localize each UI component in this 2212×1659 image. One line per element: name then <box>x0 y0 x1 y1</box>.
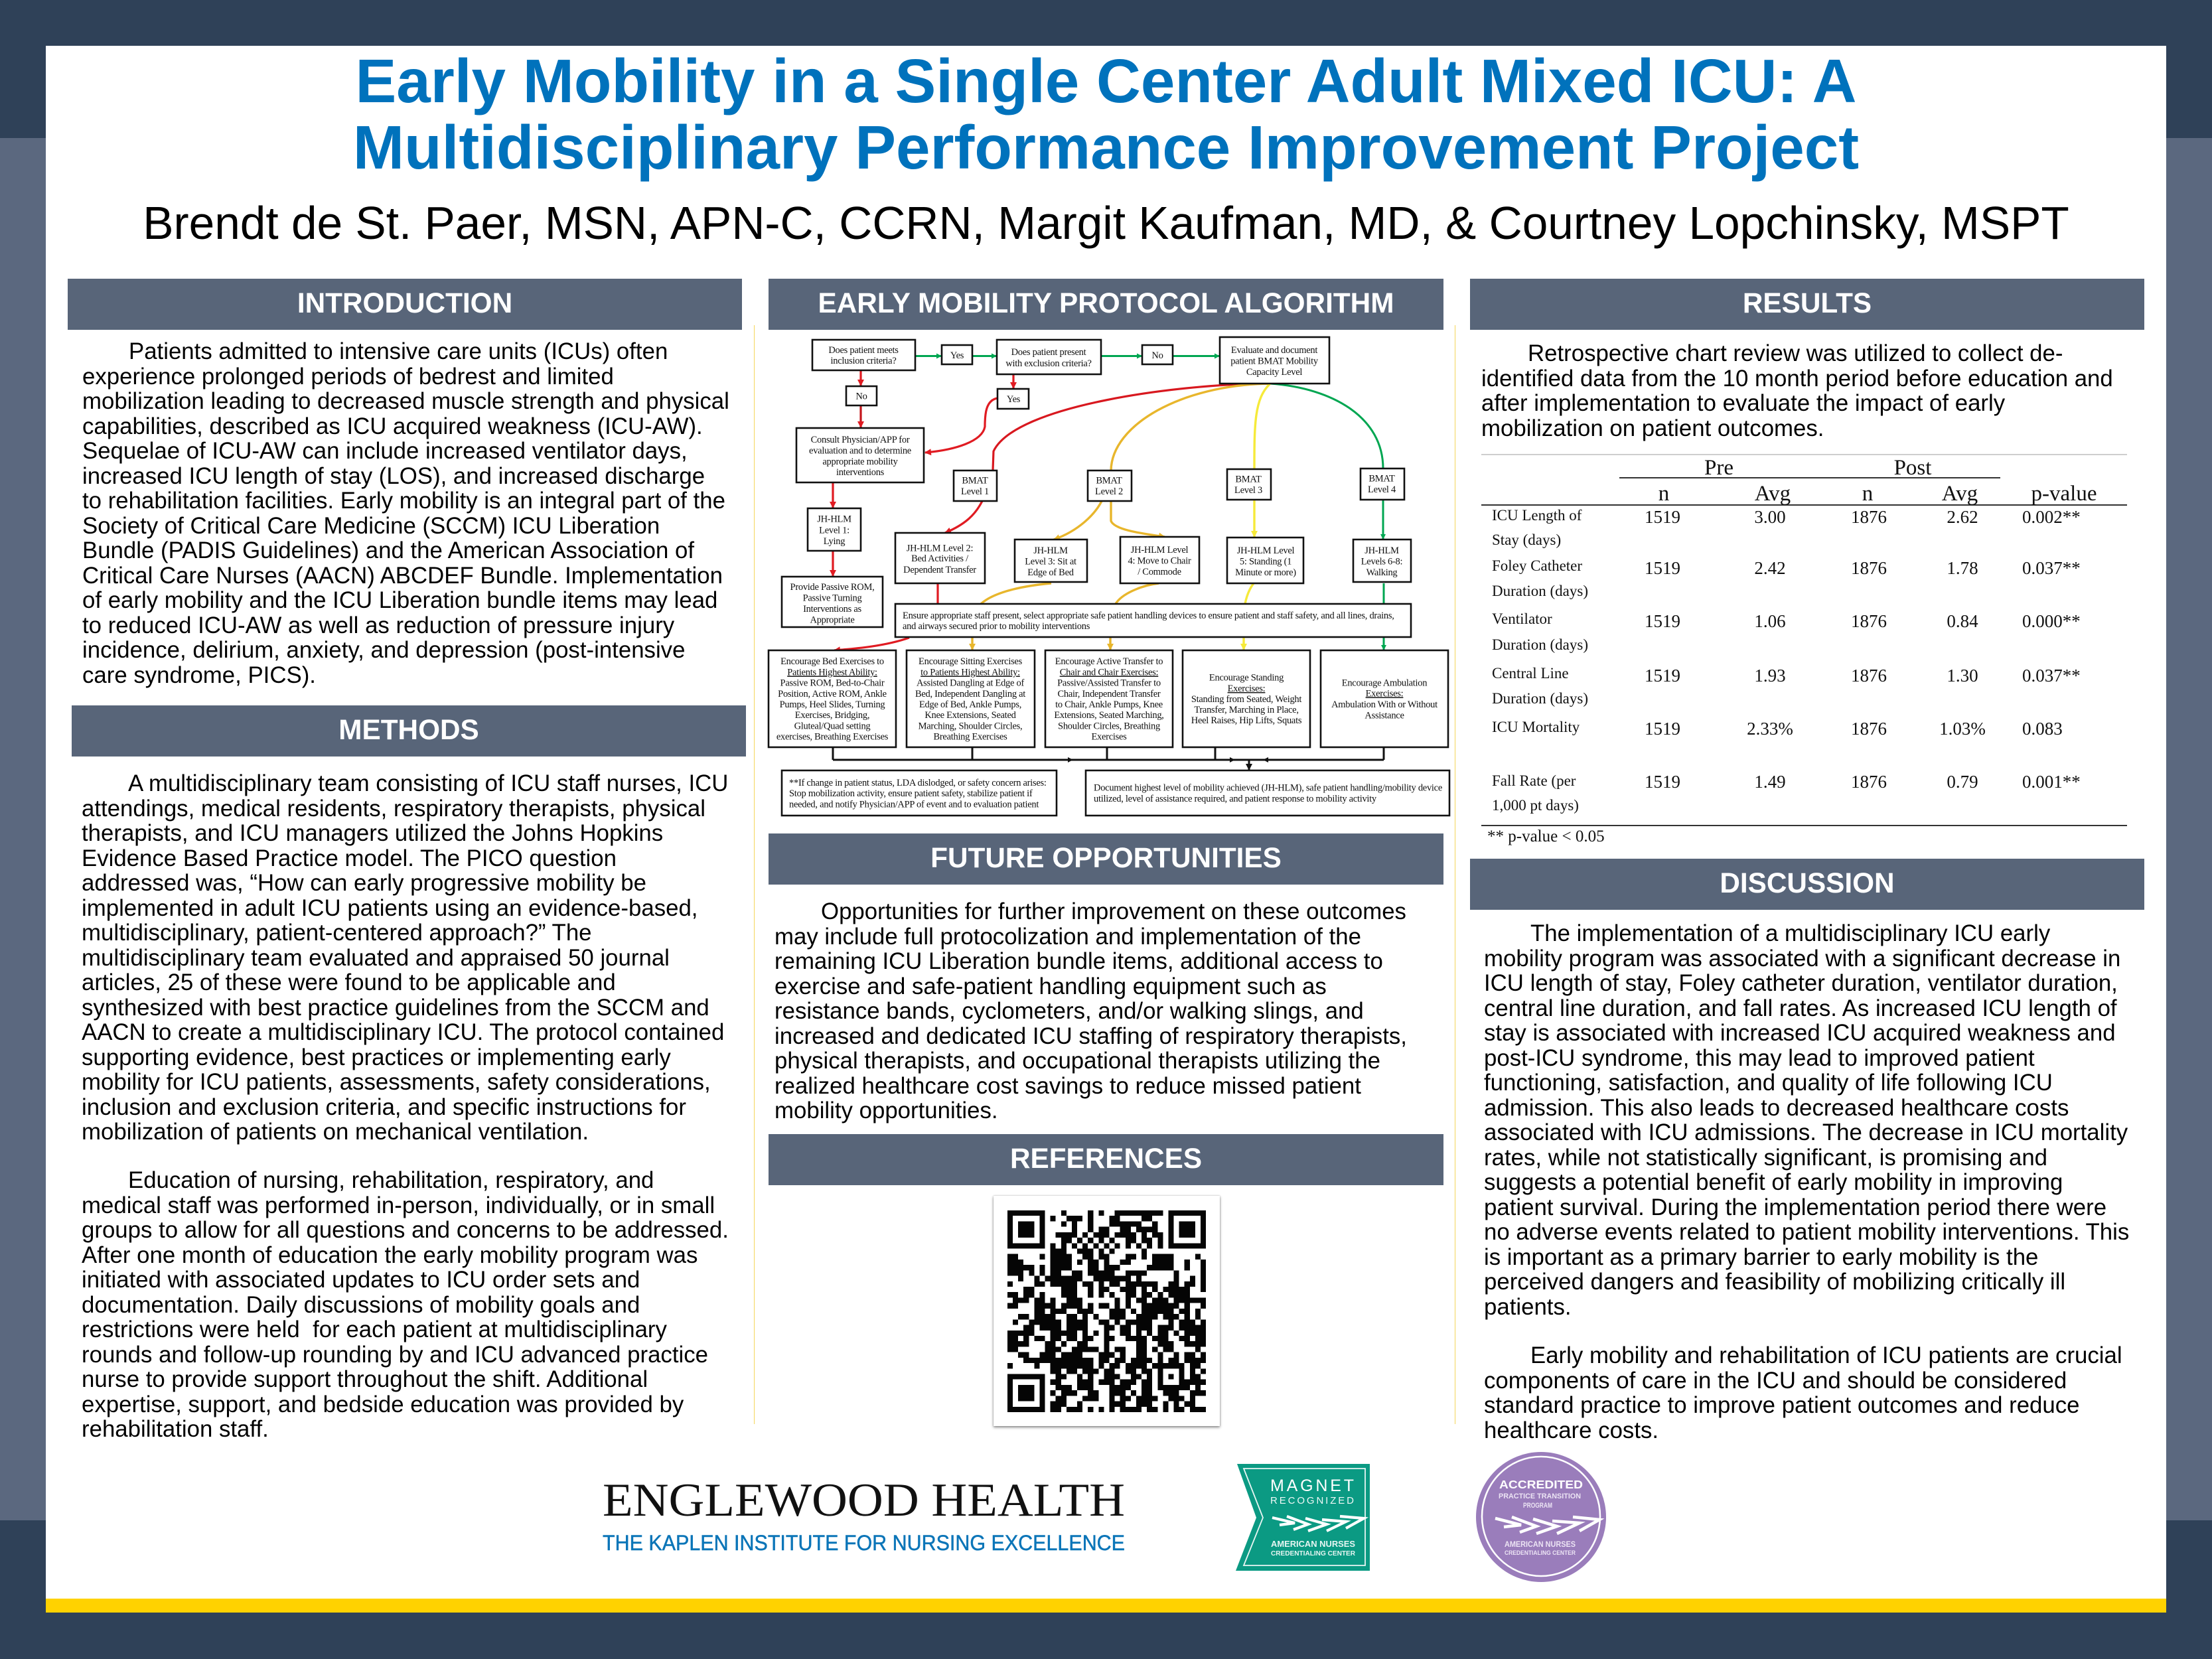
row: ICU mortality <box>1492 719 2063 739</box>
row: fall rate: 1.49 <box>1754 772 1786 792</box>
panel: methods <box>72 705 746 1442</box>
row: fall rate: Fall Rate (per <box>1492 772 1576 789</box>
box: JH-HLM level 2: Bed Activities / <box>911 553 969 564</box>
box: JH-HLM level 4: 4: Move to Chair <box>1128 556 1191 567</box>
heading: discussion: DISCUSSION <box>1720 867 1895 899</box>
heading: methods: METHODS <box>338 714 479 745</box>
QR code card <box>994 1196 1220 1426</box>
box: BMAT level 1: Level 1 <box>961 486 989 497</box>
yellow footer stripe <box>46 1599 2166 1613</box>
heading: discussion <box>1470 859 2144 910</box>
box: sitting exercises: Encourage Sitting Exercises <box>919 656 1023 667</box>
table header: n <box>1862 482 1873 506</box>
box: yes: Yes <box>950 350 964 361</box>
box: JH-HLM level 3: JH-HLM <box>1033 545 1068 556</box>
table footnote: ** p-value < 0.05 <box>1487 828 1605 845</box>
box: exclusion criteria <box>997 340 1101 374</box>
box: bed exercises: exercises, Breathing Exercises <box>776 731 889 742</box>
row: fall rate <box>1492 772 2081 814</box>
authors: Brendt de St. Paer, MSN, APN-C, CCRN, Margit Kaufman, MD, & Courtney Lopchinsky, MSPT <box>143 197 2069 249</box>
box: JH-HLM level 3: Level 3: Sit at <box>1025 556 1076 567</box>
badge: Accredited Practice Transition Program: PRACTICE TRANSITION <box>1499 1492 1581 1500</box>
heading: results: RESULTS <box>1743 287 1872 319</box>
panel: discussion <box>1470 859 2144 1443</box>
row: Foley catheter duration: Duration (days) <box>1492 583 1588 599</box>
row: ventilator duration <box>1492 611 2081 653</box>
box: ambulation exercises: Encourage Ambulation <box>1342 678 1428 689</box>
row: Foley catheter duration: 1519 <box>1645 558 1680 578</box>
row: Foley catheter duration: 2.42 <box>1754 558 1786 578</box>
row: ICU mortality: 1876 <box>1851 719 1887 739</box>
box: no (inclusion) <box>846 386 877 405</box>
badge: Accredited Practice Transition Program: CREDENTIALING CENTER <box>1505 1550 1576 1557</box>
icon: wheat sprig <box>1495 1517 1599 1534</box>
table header: Post <box>1894 456 1931 480</box>
row: ventilator duration: 0.84 <box>1947 611 1978 631</box>
box: JH-HLM levels 6-8: Levels 6-8: <box>1361 556 1402 567</box>
heading: methods <box>72 705 746 757</box>
box: BMAT level 2: Level 2 <box>1095 486 1123 497</box>
box: BMAT level 1 <box>954 470 997 501</box>
box: standing exercises <box>1183 650 1310 747</box>
badge: Accredited Practice Transition Program: PROGRAM <box>1523 1502 1552 1510</box>
box: bed exercises: Patients Highest Ability: <box>787 668 877 678</box>
box: JH-HLM level 4: / Commode <box>1138 567 1181 577</box>
logo: Englewood Health: THE KAPLEN INSTITUTE FOR NURSING EXCELLENCE <box>603 1531 1125 1555</box>
box: bed exercises: Passive ROM, Bed-to-Chair <box>780 678 885 689</box>
box: JH-HLM level 3: Edge of Bed <box>1027 567 1074 578</box>
box: JH-HLM levels 6-8: Walking <box>1366 567 1397 578</box>
heading: algorithm <box>769 279 1443 330</box>
box: JH-HLM level 1: Level 1: <box>819 526 849 536</box>
box: passive ROM <box>782 577 883 627</box>
row: central line duration: 1876 <box>1851 666 1887 685</box>
table header: Avg <box>1755 482 1791 506</box>
box: safety note <box>782 770 1057 816</box>
box: sitting exercises: Breathing Exercises <box>933 731 1007 742</box>
logo: Englewood Health: ENGLEWOOD HEALTH <box>603 1475 1125 1526</box>
row: central line duration: Central Line <box>1492 665 1569 682</box>
box: sitting exercises: Knee Extensions, Seated <box>924 710 1017 721</box>
box: documentation: Document highest level of mobility achieved (JH-HLM), safe patient handling/mobility device <box>1094 783 1442 794</box>
box: JH-HLM level 5: Minute or more) <box>1235 567 1296 578</box>
text: methods paragraph 2: Education of nursing, rehabilitation, respiratory, and medical staff was performed in-person, individually, or in small groups to allow for all questions and concerns to be addressed. After one month of education the early mobility program was initiated with associated updates to ICU order sets and documentation. Daily discussions of mobility goals and restrictions were held for each patient at multidisciplinary rounds and follow-up rounding by and ICU advanced practice nurse to provide support throughout the shift. Additional expertise, support, and bedside education was provided by rehabilitation staff. <box>82 1167 729 1442</box>
box: no (inclusion): No <box>855 392 867 402</box>
box: ensure staff: and airways secured prior to mobility interventions <box>903 621 1090 632</box>
box: evaluate BMAT <box>1220 337 1329 384</box>
box: ambulation exercises: Exercises: <box>1366 689 1403 699</box>
box: consult physician <box>796 428 924 482</box>
table header: n <box>1659 482 1669 506</box>
box: sitting exercises <box>907 650 1035 747</box>
box: BMAT level 4: BMAT <box>1368 474 1395 484</box>
box: JH-HLM levels 6-8: JH-HLM <box>1364 545 1399 556</box>
row: ICU mortality: 2.33% <box>1747 719 1793 739</box>
heading: future opportunities <box>769 833 1443 885</box>
badge: Magnet Recognized: RECOGNIZED <box>1270 1495 1354 1506</box>
row: central line duration: 1.30 <box>1947 666 1978 685</box>
text: discussion paragraph 2: Early mobility and rehabilitation of ICU patients are crucial components of care in the ICU and should be considered standard practice to improve patient outcomes and reduce healthcare costs. <box>1484 1342 2122 1443</box>
arrows: black merge lines <box>833 747 1384 770</box>
heading: introduction <box>68 279 742 330</box>
badge: Accredited Practice Transition Program: ACCREDITED <box>1499 1478 1583 1491</box>
arrows: yellow path <box>1244 384 1270 650</box>
box: JH-HLM level 2: JH-HLM Level 2: <box>907 543 973 553</box>
box: JH-HLM level 1: JH-HLM <box>817 514 851 524</box>
title <box>353 46 1859 182</box>
row: ICU mortality: 0.083 <box>2022 719 2063 739</box>
heading: future opportunities: FUTURE OPPORTUNITIES <box>930 842 1282 873</box>
row: ventilator duration: Ventilator <box>1492 611 1552 627</box>
row: fall rate: 1876 <box>1851 772 1887 792</box>
box: active transfer exercises: Chair and Chair Exercises: <box>1060 668 1158 678</box>
panel: introduction <box>68 279 742 687</box>
text: future opportunities body: Opportunities for further improvement on these outcomes may include full protocolization and implementation of the remaining ICU Liberation bundle items, additional access to exercise and safe-patient handling equipment such as resistance bands, cyclometers, and/or walking slings, and increased and dedicated ICU staffing of respiratory therapists, physical therapists, and occupational therapists utilizing the realized healthcare cost savings to reduce missed patient mobility opportunities. <box>774 899 1407 1123</box>
box: BMAT level 3 <box>1227 469 1271 500</box>
box: JH-HLM level 1 <box>808 508 861 551</box>
box: bed exercises: Exercises, Bridging, <box>795 710 869 721</box>
row: central line duration: 0.037** <box>2022 666 2081 685</box>
row: central line duration <box>1492 665 2081 707</box>
box: ambulation exercises: Ambulation With or Without <box>1331 699 1438 710</box>
box: passive ROM: Provide Passive ROM, <box>790 582 874 593</box>
box: BMAT level 2 <box>1088 470 1132 501</box>
box: BMAT level 1: BMAT <box>962 475 988 486</box>
row: Foley catheter duration: 1876 <box>1851 558 1887 578</box>
box: sitting exercises: to Patients Highest Ability: <box>921 668 1020 678</box>
heading: results <box>1470 279 2144 330</box>
box: evaluate BMAT: Evaluate and document <box>1231 345 1317 356</box>
box: standing exercises: Standing from Seated, Weight <box>1191 694 1301 705</box>
row: central line duration: Duration (days) <box>1492 690 1588 707</box>
box: active transfer exercises: to Chair, Ankle Pumps, Knee <box>1055 699 1163 710</box>
box: sitting exercises: Assisted Dangling at Edge of <box>917 678 1024 689</box>
box: no <box>1142 345 1173 364</box>
box: active transfer exercises: Chair, Independent Transfer <box>1058 689 1161 699</box>
arrows: red path <box>833 370 1270 650</box>
text: discussion paragraph 1: The implementation of a multidisciplinary ICU early mobility program was associated with a significant decrease in ICU length of stay, Foley catheter duration, ventilator duration, central line duration, and fall rates. As increased ICU length of stay is associated with increased ICU acquired weakness and post-ICU syndrome, this may lead to improved patient functioning, satisfaction, and quality of life following ICU admission. This also leads to decreased healthcare costs associated with ICU admissions. The decrease in ICU mortality rates, while not statistically significant, is promising and suggests a potential benefit of early mobility in improving patient survival. During the implementation period there were no adverse events related to patient mobility interventions. This is important as a primary barrier to early mobility is the perceived dangers and feasibility of mobilizing critically ill patients. <box>1484 920 2129 1319</box>
box: standing exercises: Transfer, Marching in Place, <box>1194 705 1299 715</box>
box: JH-HLM level 4: JH-HLM Level <box>1131 545 1188 555</box>
box: JH-HLM level 5: 5: Standing (1 <box>1240 556 1291 567</box>
box: passive ROM: Passive Turning <box>803 593 861 604</box>
box: consult physician: interventions <box>836 467 885 478</box>
box: no: No <box>1151 350 1163 361</box>
row: ventilator duration: 0.000** <box>2022 611 2081 631</box>
box: safety note: Stop mobilization activity, ensure patient safety, stabilize patient if <box>789 788 1033 799</box>
QR code <box>1007 1210 1206 1412</box>
box: safety note: needed, and notify Physician/APP of event and to evaluation patient <box>789 799 1039 810</box>
row: fall rate: 0.79 <box>1947 772 1978 792</box>
flowchart <box>767 336 1451 816</box>
box: active transfer exercises: Passive/Assisted Transfer to <box>1057 678 1161 689</box>
arrows: green yes/no path <box>915 356 1384 650</box>
box: JH-HLM level 5: JH-HLM Level <box>1237 545 1294 556</box>
box: active transfer exercises: Exercises <box>1091 731 1127 742</box>
panel: future opportunities <box>769 833 1443 1123</box>
row: fall rate: 1,000 pt days) <box>1492 797 1579 814</box>
row: ICU length of stay: ICU Length of <box>1492 507 1582 524</box>
box: BMAT level 4 <box>1361 469 1404 500</box>
row: ICU length of stay: 0.002** <box>2022 507 2081 527</box>
row: ICU length of stay: 1876 <box>1851 507 1887 527</box>
box: yes <box>942 345 972 364</box>
box: bed exercises: Gluteal/Quad setting <box>794 721 870 731</box>
row: central line duration: 1.93 <box>1754 666 1786 685</box>
box: active transfer exercises: Extensions, Seated Marching, <box>1054 710 1164 721</box>
box: BMAT level 3: BMAT <box>1235 474 1262 484</box>
badge: Magnet Recognized <box>1236 1464 1370 1571</box>
box: ambulation exercises <box>1321 650 1448 747</box>
row: central line duration: 1519 <box>1645 666 1680 685</box>
box: bed exercises <box>769 650 896 747</box>
badge: Accredited Practice Transition Program: AMERICAN NURSES <box>1505 1540 1576 1549</box>
box: inclusion criteria: Does patient meets <box>828 345 899 356</box>
heading: references: REFERENCES <box>1010 1143 1202 1174</box>
box: active transfer exercises: Shoulder Circles, Breathing <box>1058 721 1160 731</box>
heading: algorithm: EARLY MOBILITY PROTOCOL ALGORITHM <box>818 287 1394 319</box>
box: passive ROM: Interventions as <box>803 604 862 614</box>
row: ICU length of stay: 1519 <box>1645 507 1680 527</box>
box: exclusion criteria: with exclusion criteria? <box>1005 358 1092 369</box>
row: fall rate: 1519 <box>1645 772 1680 792</box>
row: ICU length of stay: 2.62 <box>1947 507 1978 527</box>
box: consult physician: evaluation and to determine <box>809 446 911 457</box>
text: methods paragraph 1: A multidisciplinary team consisting of ICU staff nurses, ICU attendings, medical residents, respiratory therapists, physical therapists, and ICU managers utilized the Johns Hopkins Evidence Based Practice model. The PICO question addressed was, “How can early progressive mobility be implemented in adult ICU patients using an evidence-based, multidisciplinary, patient-centered approach?” The multidisciplinary team evaluated and appraised 50 journal articles, 25 of these were found to be applicable and synthesized with best practice guidelines from the SCCM and AACN to create a multidisciplinary ICU. The protocol contained supporting evidence, best practices or implementing early mobility for ICU patients, assessments, safety considerations, inclusion and exclusion criteria, and specific instructions for mobilization of patients on mechanical ventilation. <box>82 770 728 1145</box>
panel: references <box>769 1134 1443 1429</box>
panel: results <box>1470 279 2144 845</box>
box: inclusion criteria: inclusion criteria? <box>831 356 896 366</box>
box: evaluate BMAT: Capacity Level <box>1246 367 1302 378</box>
box: sitting exercises: Marching, Shoulder Circles, <box>919 721 1022 731</box>
box: JH-HLM level 3 <box>1015 540 1087 582</box>
box: documentation <box>1086 770 1449 816</box>
box: bed exercises: Position, Active ROM, Ankle <box>778 689 887 699</box>
row: ventilator duration: Duration (days) <box>1492 636 1588 653</box>
row: ICU length of stay: Stay (days) <box>1492 532 1561 548</box>
box: exclusion criteria: Does patient present <box>1011 347 1086 358</box>
row: ICU mortality: 1519 <box>1645 719 1680 739</box>
text: introduction body: Patients admitted to intensive care units (ICUs) often experience prolonged periods of bedrest and limited mobilization leading to decreased muscle strength and physical capabilities, described as ICU acquired weakness (ICU-AW). Sequelae of ICU-AW can include increased ventilator days, increased ICU length of stay (LOS), and increased discharge to rehabilitation facilities. Early mobility is an integral part of the Society of Critical Care Medicine (SCCM) ICU Liberation Bundle (PADIS Guidelines) and the American Association of Critical Care Nurses (AACN) ABCDEF Bundle. Implementation of early mobility and the ICU Liberation bundle items may lead to reduced ICU-AW as well as reduction of pressure injury incidence, delirium, anxiety, and depression (post-intensive care syndrome, PICS). <box>82 338 729 687</box>
box: sitting exercises: Bed, Independent Dangling at <box>915 689 1025 699</box>
badge: Magnet Recognized: CREDENTIALING CENTER <box>1271 1550 1355 1557</box>
panel: early mobility protocol algorithm <box>767 279 1451 816</box>
results table <box>1481 454 2127 845</box>
box: sitting exercises: Edge of Bed, Ankle Pumps, <box>919 699 1021 710</box>
box: bed exercises: Encourage Bed Exercises to <box>780 656 884 667</box>
box: evaluate BMAT: patient BMAT Mobility <box>1230 356 1319 366</box>
box: active transfer exercises <box>1045 650 1173 747</box>
heading: introduction: INTRODUCTION <box>297 287 512 319</box>
text: results body: Retrospective chart review was utilized to collect de- identified data from the 10 month period before education and after implementation to evaluate the impact of early mobilization on patient outcomes. <box>1481 340 2113 441</box>
logo: Englewood Health <box>603 1475 1125 1555</box>
icon: wheat sprig <box>1272 1516 1364 1531</box>
row: ICU mortality: 1.03% <box>1939 719 1986 739</box>
table header <box>1659 456 2097 506</box>
badge: Magnet Recognized: MAGNET <box>1270 1477 1354 1495</box>
box: bed exercises: Pumps, Heel Slides, Turning <box>780 699 885 710</box>
box: ensure staff <box>895 604 1411 637</box>
box: JH-HLM level 2: Dependent Transfer <box>903 565 976 575</box>
box: consult physician: appropriate mobility <box>822 457 899 467</box>
box: BMAT level 4: Level 4 <box>1368 484 1396 495</box>
badge: Magnet Recognized: AMERICAN NURSES <box>1271 1540 1355 1549</box>
box: active transfer exercises: Encourage Active Transfer to <box>1055 656 1163 667</box>
row: Foley catheter duration: Foley Catheter <box>1492 557 1582 574</box>
box: documentation: utilized, level of assistance required, and patient response to mobility activity <box>1094 794 1377 804</box>
heading: references <box>769 1134 1443 1185</box>
box: yes (exclusion): Yes <box>1007 394 1021 405</box>
box: BMAT level 3: Level 3 <box>1234 485 1262 496</box>
row: ICU length of stay <box>1492 507 2081 548</box>
box: ambulation exercises: Assistance <box>1364 710 1404 721</box>
box: standing exercises: Exercises: <box>1228 684 1265 694</box>
row: Foley catheter duration <box>1492 557 2081 599</box>
box: BMAT level 2: BMAT <box>1096 475 1122 486</box>
box: JH-HLM level 2 <box>895 533 985 583</box>
row: ventilator duration: 1.06 <box>1754 611 1786 631</box>
box: passive ROM: Appropriate <box>810 614 854 625</box>
box: safety note: **If change in patient status, LDA dislodged, or safety concern arises: <box>789 778 1047 788</box>
box: ensure staff: Ensure appropriate staff present, select appropriate safe patient handling devices to ensure patient and staff safety, and all lines, drains, <box>903 611 1394 621</box>
row: ICU length of stay: 3.00 <box>1754 507 1786 527</box>
arrows: orange path <box>972 384 1270 650</box>
row: ventilator duration: 1519 <box>1645 611 1680 631</box>
box: standing exercises: Heel Raises, Hip Lifts, Squats <box>1191 715 1302 726</box>
row: ventilator duration: 1876 <box>1851 611 1887 631</box>
box: JH-HLM levels 6-8 <box>1353 540 1411 582</box>
title: Early Mobility in a Single Center Adult Mixed ICU: A <box>356 46 1856 115</box>
row: Foley catheter duration: 1.78 <box>1947 558 1978 578</box>
box: JH-HLM level 5 <box>1227 538 1303 583</box>
row: fall rate: 0.001** <box>2022 772 2081 792</box>
table header: Avg <box>1942 482 1978 506</box>
table header: Pre <box>1704 456 1733 480</box>
box: inclusion criteria <box>812 340 915 370</box>
title: Multidisciplinary Performance Improvement Project <box>353 113 1859 182</box>
box: JH-HLM level 1: Lying <box>824 536 845 547</box>
row: ICU mortality: ICU Mortality <box>1492 719 1580 735</box>
box: yes (exclusion) <box>997 389 1029 409</box>
box: standing exercises: Encourage Standing <box>1209 673 1284 684</box>
badge: Accredited Practice Transition Program <box>1476 1452 1606 1582</box>
row: Foley catheter duration: 0.037** <box>2022 558 2081 578</box>
box: consult physician: Consult Physician/APP for <box>811 435 910 445</box>
table header: p-value <box>2031 482 2097 506</box>
box: JH-HLM level 4 <box>1120 537 1199 583</box>
